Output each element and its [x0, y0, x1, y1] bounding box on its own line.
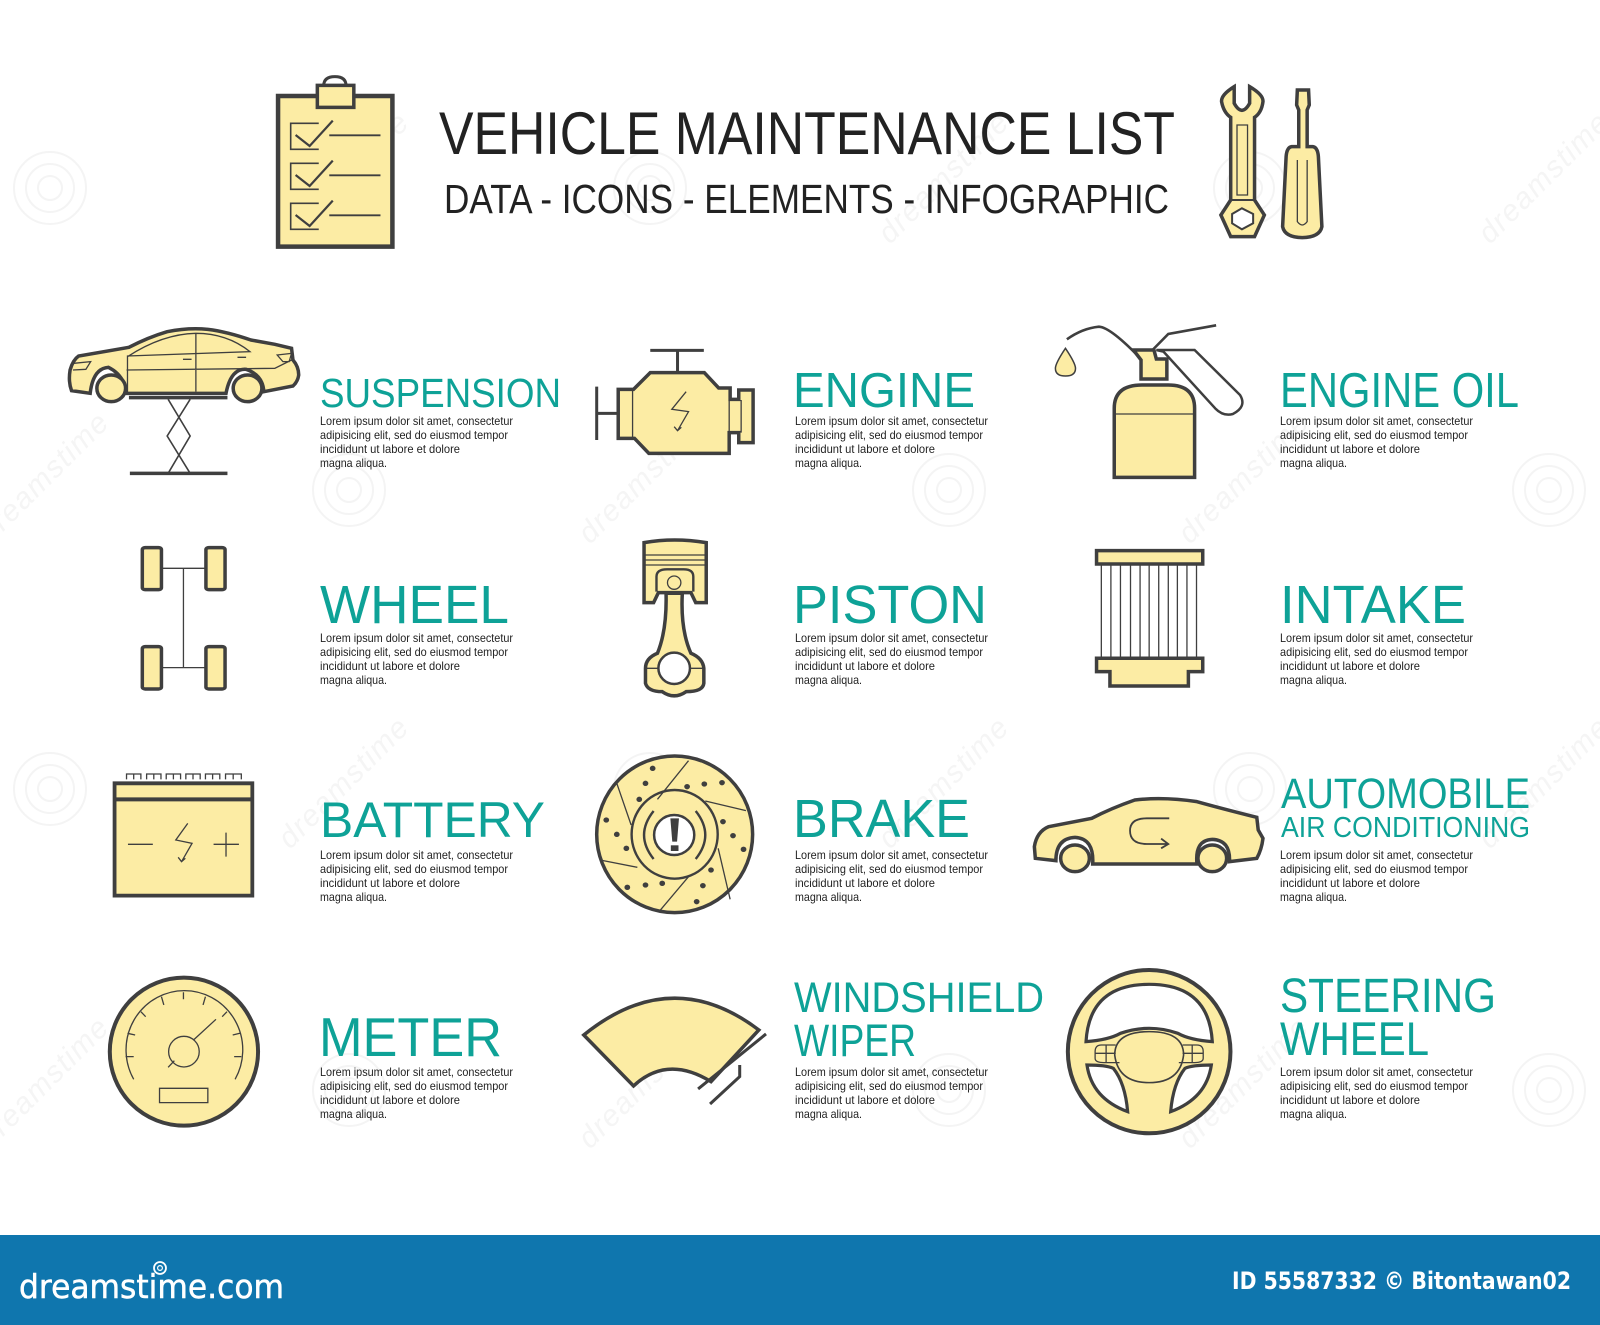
- panel: air conditioning: [1034, 770, 1530, 904]
- heading: WINDSHIELD: [794, 974, 1044, 1022]
- panel: suspension: [69, 329, 561, 473]
- text block: adipisicing elit, sed do eiusmod tempor: [320, 1079, 508, 1093]
- text block: adipisicing elit, sed do eiusmod tempor: [795, 428, 983, 442]
- text block: adipisicing elit, sed do eiusmod tempor: [320, 645, 508, 659]
- icon: screwdriver: [1283, 90, 1322, 238]
- text block: incididunt ut labore et dolore: [1280, 442, 1420, 456]
- text block: magna aliqua.: [1280, 890, 1347, 904]
- text block: incididunt ut labore et dolore: [320, 659, 460, 673]
- text block: incididunt ut labore et dolore: [320, 442, 460, 456]
- text block: incididunt ut labore et dolore: [795, 876, 935, 890]
- icon: steering wheel: [1068, 970, 1230, 1133]
- text block: [320, 848, 513, 904]
- text block: magna aliqua.: [795, 456, 862, 470]
- text block: [1280, 1065, 1473, 1121]
- text block: [1280, 848, 1473, 904]
- icon: air filter: [1097, 551, 1203, 686]
- text block: magna aliqua.: [795, 673, 862, 687]
- text block: adipisicing elit, sed do eiusmod tempor: [795, 862, 983, 876]
- text block: Lorem ipsum dolor sit amet, consectetur: [320, 631, 513, 645]
- panel: meter: [110, 978, 513, 1126]
- text block: Lorem ipsum dolor sit amet, consectetur: [795, 848, 988, 862]
- panel: piston: [644, 540, 988, 696]
- text block: magna aliqua.: [320, 673, 387, 687]
- heading: ENGINE: [793, 364, 975, 418]
- text block: [320, 631, 513, 687]
- text block: adipisicing elit, sed do eiusmod tempor: [320, 862, 508, 876]
- icon: car with recirculation arrow: [1034, 799, 1263, 872]
- heading: INTAKE: [1280, 575, 1466, 635]
- text block: adipisicing elit, sed do eiusmod tempor: [795, 1079, 983, 1093]
- icon: car on scissor lift: [69, 329, 299, 473]
- text block: magna aliqua.: [1280, 456, 1347, 470]
- text block: Lorem ipsum dolor sit amet, consectetur: [320, 1065, 513, 1079]
- heading: WIPER: [794, 1015, 916, 1066]
- text block: Lorem ipsum dolor sit amet, consectetur: [1280, 631, 1473, 645]
- heading: SUSPENSION: [320, 370, 561, 416]
- text block: incididunt ut labore et dolore: [795, 1093, 935, 1107]
- icon: wrench: [1221, 87, 1264, 237]
- panel: engine oil: [1055, 325, 1519, 477]
- text block: incididunt ut labore et dolore: [795, 659, 935, 673]
- text block: Lorem ipsum dolor sit amet, consectetur: [320, 848, 513, 862]
- text block: adipisicing elit, sed do eiusmod tempor: [1280, 1079, 1468, 1093]
- heading: BATTERY: [320, 792, 545, 848]
- text: dreamstime: [272, 711, 415, 855]
- heading: WHEEL: [1280, 1012, 1429, 1065]
- heading: METER: [319, 1006, 502, 1068]
- text: dreamstime: [872, 711, 1015, 855]
- panel: wheel: [142, 548, 513, 689]
- text block: [320, 1065, 513, 1121]
- text block: Lorem ipsum dolor sit amet, consectetur: [795, 1065, 988, 1079]
- text: dreamstime: [1172, 406, 1315, 550]
- text block: incididunt ut labore et dolore: [320, 876, 460, 890]
- text block: [795, 631, 988, 687]
- text block: magna aliqua.: [1280, 673, 1347, 687]
- text block: Lorem ipsum dolor sit amet, consectetur: [795, 631, 988, 645]
- text: dreamstime: [272, 106, 415, 250]
- text block: incididunt ut labore et dolore: [1280, 1093, 1420, 1107]
- title: VEHICLE MAINTENANCE LIST: [439, 100, 1175, 167]
- text: dreamstime: [572, 1011, 715, 1155]
- subtitle: DATA - ICONS - ELEMENTS - INFOGRAPHIC: [444, 176, 1169, 222]
- text: dreamstime: [572, 406, 715, 550]
- text block: incididunt ut labore et dolore: [1280, 659, 1420, 673]
- icon: battery: [115, 774, 252, 896]
- text block: Lorem ipsum dolor sit amet, consectetur: [320, 414, 513, 428]
- icon: windshield wiper: [584, 998, 766, 1104]
- text block: magna aliqua.: [795, 1107, 862, 1121]
- heading: [1281, 770, 1530, 844]
- text block: adipisicing elit, sed do eiusmod tempor: [320, 428, 508, 442]
- text block: incididunt ut labore et dolore: [795, 442, 935, 456]
- text block: magna aliqua.: [320, 1107, 387, 1121]
- heading: [1280, 970, 1496, 1065]
- heading: AIR CONDITIONING: [1281, 812, 1530, 844]
- heading: WHEEL: [320, 575, 509, 635]
- panel: battery: [115, 774, 545, 904]
- text block: magna aliqua.: [1280, 1107, 1347, 1121]
- text block: magna aliqua.: [320, 456, 387, 470]
- text block: [1280, 631, 1473, 687]
- icon: piston: [644, 540, 706, 696]
- header: [278, 77, 1322, 247]
- icon: brake disc: [597, 756, 753, 913]
- text block: Lorem ipsum dolor sit amet, consectetur: [1280, 1065, 1473, 1079]
- heading: AUTOMOBILE: [1281, 770, 1530, 818]
- text block: Lorem ipsum dolor sit amet, consectetur: [795, 414, 988, 428]
- text block: adipisicing elit, sed do eiusmod tempor: [1280, 862, 1468, 876]
- panel: steering wheel: [1068, 970, 1496, 1133]
- panel: intake: [1097, 551, 1473, 687]
- text block: Lorem ipsum dolor sit amet, consectetur: [1280, 414, 1473, 428]
- panel: brake: [597, 756, 988, 913]
- heading: STEERING: [1280, 970, 1496, 1023]
- text: dreamstime: [1172, 1011, 1315, 1155]
- text block: Lorem ipsum dolor sit amet, consectetur: [1280, 848, 1473, 862]
- icon: wheel chassis: [142, 548, 225, 689]
- text block: [795, 848, 988, 904]
- icon: speedometer: [110, 978, 258, 1126]
- text block: [320, 414, 513, 470]
- text block: [795, 414, 988, 470]
- icon: clipboard checklist: [278, 77, 392, 247]
- panel: engine: [597, 350, 988, 470]
- text block: magna aliqua.: [795, 890, 862, 904]
- text block: incididunt ut labore et dolore: [320, 1093, 460, 1107]
- heading: BRAKE: [793, 789, 970, 849]
- text block: adipisicing elit, sed do eiusmod tempor: [795, 645, 983, 659]
- text block: adipisicing elit, sed do eiusmod tempor: [1280, 428, 1468, 442]
- panel: windshield wiper: [584, 974, 1044, 1121]
- footer bar: [0, 1235, 1600, 1325]
- logo: dreamstime.com: [19, 1267, 284, 1306]
- text block: magna aliqua.: [320, 890, 387, 904]
- heading: ENGINE OIL: [1280, 364, 1519, 418]
- text block: [795, 1065, 988, 1121]
- heading: PISTON: [793, 575, 987, 635]
- icon: oil can: [1055, 325, 1242, 477]
- text block: [1280, 414, 1473, 470]
- text: dreamstime: [872, 106, 1015, 250]
- text block: adipisicing elit, sed do eiusmod tempor: [1280, 645, 1468, 659]
- icon: engine: [597, 350, 753, 453]
- text block: incididunt ut labore et dolore: [1280, 876, 1420, 890]
- heading: [794, 974, 1044, 1066]
